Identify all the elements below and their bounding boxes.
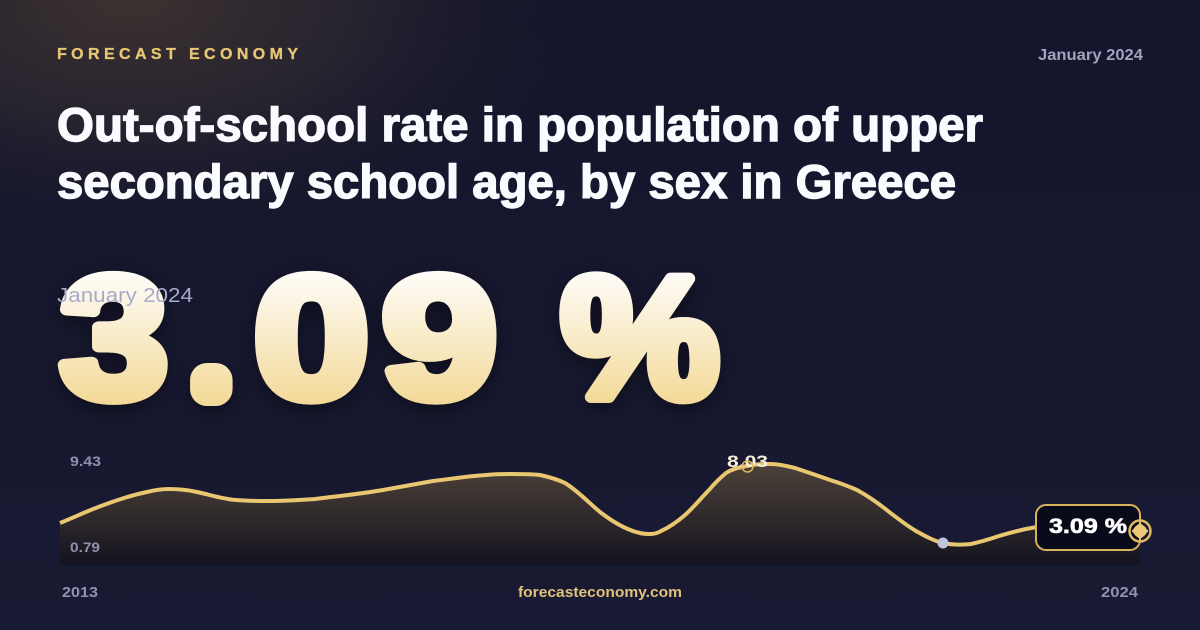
peak label: 8.03: [727, 452, 768, 471]
x axis start: 2013: [62, 584, 98, 601]
y axis min: 0.79: [70, 539, 100, 555]
title: secondary school age, by sex in Greece: [57, 155, 956, 208]
area chart: [60, 452, 1150, 565]
y axis max: 9.43: [70, 453, 101, 469]
x axis end: 2024: [1101, 584, 1139, 601]
latest value callout: [1036, 505, 1140, 550]
big value: .: [203, 335, 220, 402]
big value: 3: [60, 242, 168, 434]
title: [57, 98, 983, 208]
source link: forecasteconomy.com: [518, 584, 682, 601]
big value: [60, 242, 719, 434]
low marker: [938, 538, 948, 548]
latest marker: [1130, 520, 1150, 542]
chart line: [60, 464, 1037, 545]
big value: 0: [254, 242, 369, 434]
chart area fill: [60, 464, 1140, 565]
date overlay on value: January 2024: [57, 285, 193, 307]
big value: 9: [382, 242, 497, 434]
latest value callout: 3.09 %: [1049, 515, 1127, 538]
peak marker: [742, 461, 753, 472]
date top right: January 2024: [1038, 47, 1143, 64]
title: Out-of-school rate in population of upper: [57, 98, 983, 151]
big value: %: [561, 242, 719, 434]
brand label: FORECAST ECONOMY: [57, 46, 298, 63]
